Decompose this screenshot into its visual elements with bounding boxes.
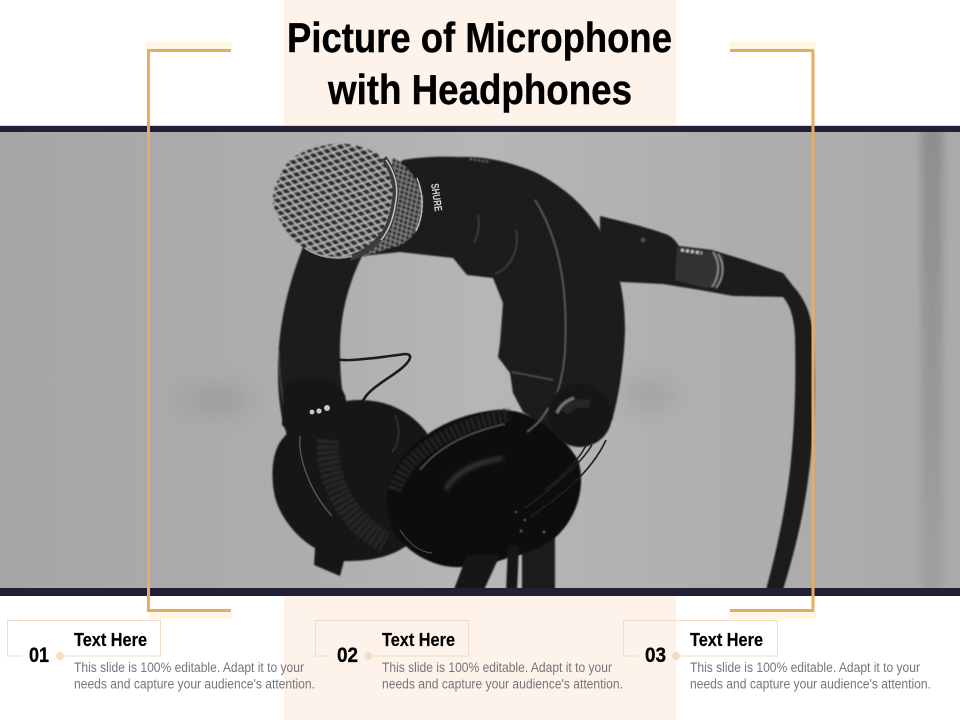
bottom dark band (0, 588, 960, 596)
microphone grille front (273, 144, 394, 258)
item 02: 02 (337, 644, 358, 667)
XLR connector and cable (600, 216, 815, 590)
item 02: Text Here (382, 630, 455, 650)
left ear cup (272, 377, 427, 576)
frame glow (145, 42, 816, 619)
title: Picture of Microphone (287, 14, 672, 61)
item 02: needs and capture your audience's attention. (382, 676, 623, 692)
headphone hinge (527, 383, 612, 447)
thin headphone cable (339, 352, 412, 402)
top dark band (0, 125, 960, 132)
item 01: 01 (29, 644, 49, 667)
lower cables (453, 511, 545, 592)
peach column background (284, 0, 676, 720)
orange frame right bracket (730, 50, 813, 610)
item 01: needs and capture your audience's attention. (74, 676, 315, 692)
item 01: This slide is 100% editable. Adapt it to your (74, 660, 304, 675)
headphone wires and yoke (525, 440, 606, 517)
microphone grille ring (416, 178, 422, 231)
item 03: needs and capture your audience's attention. (690, 676, 931, 692)
title (287, 14, 672, 113)
microphone stand pole (521, 536, 556, 588)
brand text on microphone: SHURE (428, 183, 444, 212)
item 01: Text Here (74, 630, 147, 650)
title: with Headphones (327, 66, 632, 113)
orange frame left bracket (148, 50, 231, 610)
photo: microphone with headphones (0, 120, 960, 600)
photo background wall (0, 120, 960, 600)
item 01 (8, 620, 315, 692)
item 03 (624, 620, 931, 692)
microphone collar (418, 176, 458, 252)
item 03: This slide is 100% editable. Adapt it to your (690, 660, 920, 675)
item 02 (316, 620, 623, 692)
headband and mic body (278, 157, 625, 445)
item 03: 03 (645, 644, 666, 667)
microphone grille rear (363, 158, 423, 257)
item 03: Text Here (690, 630, 763, 650)
item 02: This slide is 100% editable. Adapt it to your (382, 660, 612, 675)
right ear cup (387, 410, 581, 567)
